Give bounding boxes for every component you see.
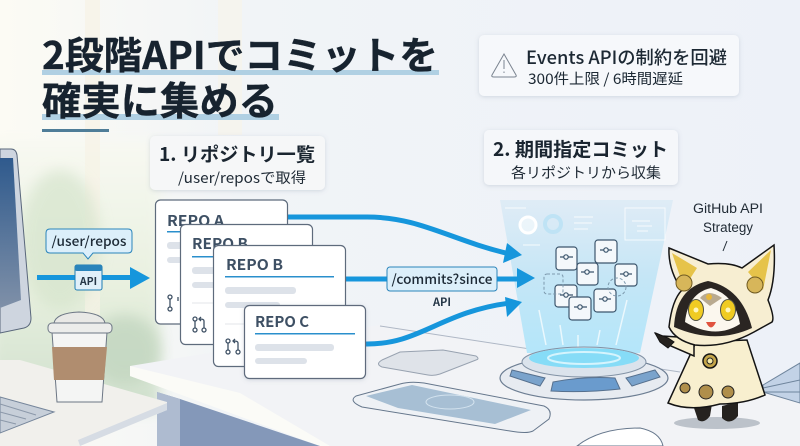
label: step 1 — [150, 136, 325, 190]
keyboard — [0, 397, 54, 433]
desk left — [0, 360, 167, 446]
phone on desk — [353, 382, 550, 432]
icon: branch — [193, 317, 206, 332]
label: commits endpoint — [387, 267, 497, 310]
card: repo A: REPO A — [167, 210, 224, 231]
icon: warning triangle — [492, 54, 516, 77]
mascot caption: Strategy — [703, 220, 753, 235]
card: repo C — [244, 306, 366, 378]
card: repo B back — [180, 224, 312, 344]
title: 確実に集める — [42, 71, 278, 127]
label: commits endpoint: API — [432, 294, 451, 310]
card: repo B front: REPO B — [226, 254, 283, 275]
label: step 2 — [484, 130, 678, 185]
callout: Events API limits — [479, 35, 739, 96]
callout: Events API limits: 300件上限 / 6時間遅延 — [528, 68, 684, 89]
card: repo B back: REPO B — [192, 233, 248, 254]
card: repo A — [156, 200, 288, 324]
icon: commit tiles — [555, 240, 637, 320]
label: step 2: 各リポジトリから収集 — [511, 162, 662, 183]
card: repo B front — [214, 246, 346, 366]
label: step 1: /user/reposで取得 — [178, 167, 306, 188]
monitor — [0, 149, 31, 333]
arrows into hologram — [287, 217, 520, 344]
hologram projector — [500, 200, 673, 400]
arrow: api to repos — [37, 229, 150, 290]
icon: API window: API — [79, 274, 97, 289]
title: 2段階APIでコミットを — [42, 25, 438, 80]
desk right — [130, 325, 800, 446]
mascot — [655, 245, 774, 429]
tablet on desk — [378, 350, 478, 375]
label: step 1: 1. リポジトリ一覧 — [159, 140, 315, 167]
icon: branch — [226, 339, 240, 354]
mascot caption — [693, 201, 763, 251]
label: step 2: 2. 期間指定コミット — [493, 135, 668, 162]
label: commits endpoint: /commits?since — [392, 268, 493, 288]
callout: Events API limits: Events APIの制約を回避 — [526, 44, 727, 70]
books — [763, 363, 800, 403]
coffee cup — [48, 312, 112, 402]
icon: branch — [168, 295, 178, 311]
mascot caption: GitHub API — [693, 201, 763, 216]
card: repo C: REPO C — [255, 311, 309, 332]
base — [500, 356, 668, 400]
bubble: /user/repos: /user/repos — [52, 231, 126, 250]
title — [42, 25, 439, 132]
mouse — [577, 428, 663, 446]
